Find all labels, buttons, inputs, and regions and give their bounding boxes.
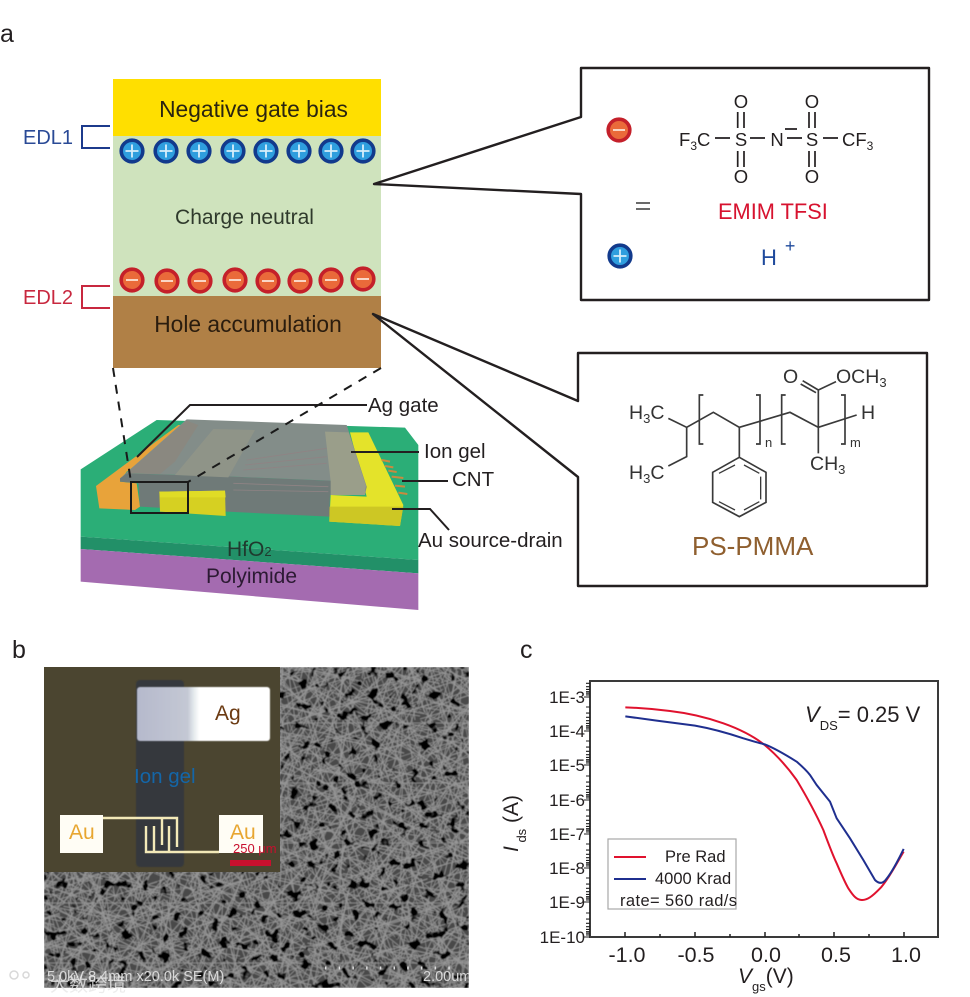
PS-PMMA atom labels: 3 [879, 375, 887, 390]
Au pads [60, 815, 263, 853]
callout frame [373, 314, 927, 586]
negative gate bias layer: Negative gate bias [159, 96, 348, 122]
PS-PMMA atom labels: 3 [643, 411, 650, 426]
HfO2 dark band [81, 537, 418, 573]
x tick labels: 0.0 [751, 943, 781, 967]
inset scale label: 250 μm [233, 841, 277, 856]
callout: EMIM TFSI [374, 68, 929, 300]
PS-PMMA atom labels: CH [810, 453, 838, 475]
EDL2 label and bracket [23, 286, 110, 309]
device schematic [81, 368, 563, 610]
TFSI structure: O [734, 166, 748, 187]
y tick labels: 1E-6 [549, 791, 585, 810]
VDS annotation: DS [820, 718, 838, 733]
PS-PMMA atom labels: H [629, 402, 643, 424]
Ion gel leader [351, 440, 486, 463]
Ag label: Ag [215, 702, 241, 725]
y tick labels: 1E-9 [549, 893, 585, 912]
panel b: SEM image with inset [10, 667, 471, 996]
panel label b: b [12, 636, 26, 664]
polyimide layer [81, 549, 418, 610]
left Au electrode [159, 491, 226, 516]
anion icon [608, 119, 630, 141]
legend: rate= 560 rad/s [620, 892, 737, 910]
Ag gate leader: Ag gate [368, 394, 439, 417]
TFSI structure: O [734, 91, 748, 112]
TFSI structure: CF [842, 129, 867, 150]
PS-PMMA atom labels: C [650, 402, 664, 424]
anions row [121, 268, 374, 292]
cation icon [609, 245, 631, 267]
HfO2 label: HfO2 [227, 538, 272, 561]
Ag electrode [137, 687, 270, 741]
interdigitated wires [103, 818, 219, 852]
Au source-drain leader [392, 509, 563, 552]
zoom box [131, 482, 188, 513]
TFSI structure: 3 [867, 139, 874, 153]
watermark: 大数跨境 [50, 974, 126, 996]
left electrode top highlight [159, 491, 226, 497]
x tick labels: 1.0 [891, 943, 921, 967]
equals sign [636, 203, 650, 209]
right Au electrode [329, 432, 403, 526]
x tick labels [608, 943, 921, 967]
TFSI structure: O [805, 166, 819, 187]
red curve: Pre Rad [625, 707, 904, 900]
ion gel top face [120, 419, 367, 487]
panel label a: a [0, 20, 14, 48]
legend: Pre Rad [665, 848, 726, 866]
VDS annotation: V [805, 702, 822, 727]
TFSI structure: O [805, 91, 819, 112]
EDL1 label and bracket: EDL1 [23, 127, 73, 149]
PS-PMMA atom labels: n [765, 435, 772, 450]
y tick labels: 1E-3 [549, 688, 585, 707]
cations row [121, 140, 374, 162]
gel over right electrode [325, 432, 366, 495]
PS-PMMA atom labels: H [629, 462, 643, 484]
panel a: layer stack [113, 79, 381, 368]
y tick labels: 1E-7 [549, 825, 585, 844]
EDL2 label and bracket: EDL2 [23, 287, 73, 309]
watermark [10, 971, 126, 996]
x tick labels: -0.5 [677, 943, 715, 967]
PS-PMMA atom labels [629, 366, 887, 486]
PS-PMMA atom labels: 3 [643, 471, 650, 486]
PS-PMMA label: PS-PMMA [692, 531, 814, 561]
SEM scale ticks [325, 966, 462, 970]
H+ label: H [761, 245, 777, 270]
TFSI structure: C [697, 129, 710, 150]
y axis ticks [584, 673, 590, 937]
Ion gel leader: Ion gel [424, 440, 486, 463]
y tick labels: 1E-8 [549, 859, 585, 878]
PS-PMMA atom labels: m [850, 435, 861, 450]
TFSI structure: S [735, 129, 747, 150]
ion gel front face [120, 473, 367, 517]
y axis title: (A) [500, 795, 523, 829]
Ion gel label: Ion gel [134, 765, 196, 788]
legend [608, 839, 737, 910]
Au labels [69, 821, 256, 844]
EDL1 label and bracket [23, 126, 110, 149]
x axis title: gs [752, 979, 766, 994]
panel c: transfer curve chart [500, 673, 938, 994]
y tick labels: 1E-4 [549, 722, 585, 741]
dashed zoom lines [113, 368, 381, 482]
gel column [136, 680, 184, 867]
gel over gate [127, 421, 198, 474]
TFSI structure [679, 91, 874, 187]
y axis title: ds [514, 828, 529, 846]
CNT leader [402, 468, 495, 491]
CNT leader: CNT [452, 468, 495, 491]
x tick labels: 0.5 [821, 943, 851, 967]
VDS annotation: = 0.25 V [838, 702, 921, 727]
hole accumulation layer: Hole accumulation [154, 311, 342, 337]
x axis ticks [625, 932, 904, 937]
TFSI structure: 3 [690, 139, 697, 153]
TFSI structure: F [679, 129, 690, 150]
TFSI structure: S [806, 129, 818, 150]
Au labels: Au [230, 821, 256, 844]
callout frame [374, 68, 929, 300]
PS-PMMA atom labels: O [783, 366, 798, 388]
y tick labels: 1E-5 [549, 756, 585, 775]
blue curve: 4000 Krad [625, 716, 904, 883]
inset scale bar [230, 860, 271, 866]
x tick labels: -1.0 [608, 943, 646, 967]
Au labels: Au [69, 821, 95, 844]
charge neutral layer [113, 136, 381, 296]
PS-PMMA atom labels: OCH [836, 366, 879, 388]
TFSI structure: N [770, 129, 784, 150]
SEM scale label: 2.00um [423, 969, 471, 985]
negative gate bias layer [113, 79, 381, 136]
PS-PMMA atom labels: C [650, 462, 664, 484]
y tick labels [540, 688, 585, 947]
EMIM TFSI label: EMIM TFSI [718, 199, 828, 224]
x axis title: (V) [766, 965, 794, 988]
Ag gate electrode [96, 425, 193, 510]
hole accumulation layer [113, 296, 381, 368]
plot frame [590, 681, 938, 937]
y axis title: I [500, 846, 523, 852]
PS-PMMA atom labels: 3 [838, 462, 845, 477]
CNT ends [382, 460, 407, 494]
Au source-drain leader: Au source-drain [418, 529, 563, 552]
CNT channel [233, 448, 328, 492]
PS-PMMA atom labels: H [861, 402, 875, 424]
H+ label: + [785, 236, 795, 256]
y tick labels: 1E-10 [540, 928, 585, 947]
green substrate [81, 420, 418, 560]
Ag gate leader [137, 394, 439, 457]
legend: 4000 Krad [655, 870, 731, 888]
PS-PMMA skeletal bonds [668, 381, 857, 517]
optical inset [44, 667, 280, 872]
right electrode front face [329, 507, 403, 526]
charge neutral layer: Charge neutral [175, 206, 314, 229]
gel over left electrode [175, 429, 255, 477]
panel label c: c [520, 636, 532, 664]
Polyimide label: Polyimide [206, 565, 297, 588]
SEM nanotube network [44, 667, 471, 988]
callout: PS-PMMA [373, 314, 927, 586]
x axis title: V [738, 965, 754, 988]
SEM metadata left: 5.0kV 8.4mm x20.0k SE(M) [47, 969, 224, 985]
